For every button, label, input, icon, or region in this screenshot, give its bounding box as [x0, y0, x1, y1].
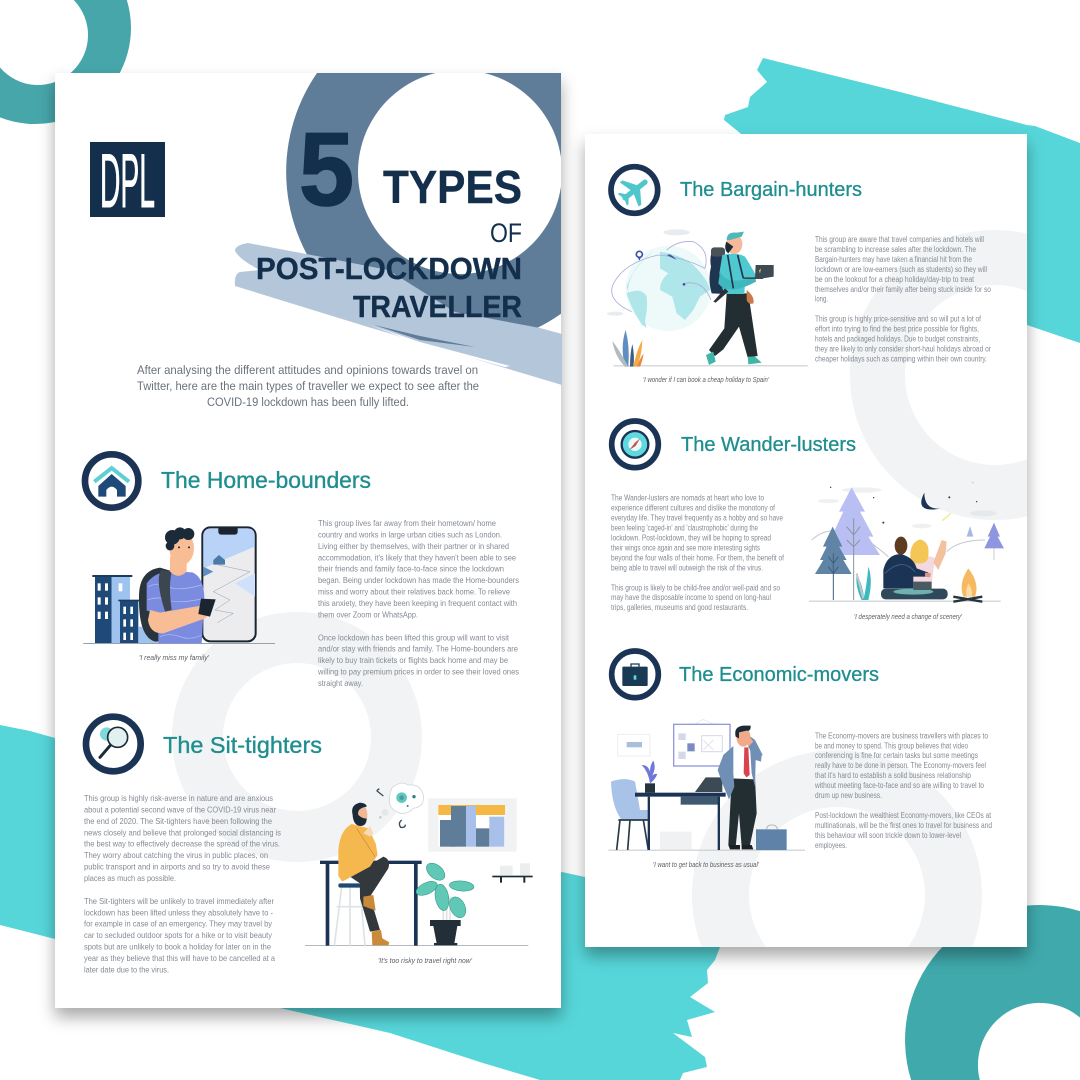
- quote: 'I wonder if I can book a cheap holiday to Spain': [643, 375, 769, 384]
- body text: This group is likely to be child-free and/or well-paid and so: [611, 583, 781, 592]
- illustration: man at table worrying: [305, 783, 533, 946]
- title: TYPES: [383, 161, 522, 213]
- panel: right infographic sheet: [585, 134, 1027, 947]
- icon: compass: [612, 421, 658, 468]
- body text: they are likely to only consider short-haul holidays abroad or: [815, 344, 991, 354]
- body text: [84, 793, 282, 974]
- body text: them over Zoom or WhatsApp.: [318, 609, 418, 619]
- body text: began. Being under lockdown has made the Home-bounders: [318, 575, 520, 585]
- body text: country and works in large urban cities such as London.: [318, 529, 502, 539]
- heading: The Sit-tighters: [163, 732, 322, 758]
- body text: beyond the four walls of their home. For them, the benefit of: [611, 553, 785, 562]
- icon: briefcase: [612, 651, 658, 698]
- background: bottom teal brush stroke: [280, 872, 720, 1080]
- quote: 'I want to get back to business as usual': [653, 860, 759, 869]
- intro text: [137, 363, 479, 409]
- body text: miss and worry about their relatives back home. To relieve: [318, 587, 510, 597]
- icon: magnifier: [86, 717, 141, 771]
- body text: straight away.: [318, 678, 363, 688]
- body text: The Sit-tighters will be unlikely to travel immediately after: [84, 896, 274, 906]
- intro text: After analysing the different attitudes and opinions towards travel on: [137, 363, 478, 377]
- title: [256, 112, 522, 324]
- body text: Living either by themselves, with their partner or in shared: [318, 541, 509, 551]
- body text: lockdown or are low-earners (such as students) so they will: [815, 265, 987, 274]
- text: DPL: [100, 139, 155, 224]
- title: POST-LOCKDOWN: [256, 251, 522, 286]
- icon: aeroplane: [611, 167, 658, 213]
- title: 5: [299, 112, 354, 228]
- panel: left infographic sheet: [55, 73, 561, 1008]
- heading: The Bargain-hunters: [680, 179, 862, 201]
- heading: The Wander-lusters: [681, 434, 856, 456]
- body text: places as much as possible.: [84, 873, 176, 883]
- section: The Home-bounders: [83, 454, 520, 688]
- body text: [611, 494, 785, 612]
- section: The Economic-movers: [608, 651, 992, 869]
- body text: been feeling 'caged-in' and 'claustrophobic' during the: [611, 524, 758, 533]
- background: top-right teal brush stroke: [724, 58, 1080, 343]
- section: The Bargain-hunters: [607, 167, 992, 384]
- body text: year as they believe that this will have to be cancelled at a: [84, 953, 275, 963]
- body text: this anxiety, they have been keeping in frequent contact with: [318, 598, 517, 608]
- body text: experience different cultures and dislike the monotony of: [611, 504, 776, 513]
- body text: drum up new business.: [815, 791, 882, 800]
- body text: [814, 731, 992, 850]
- title: TRAVELLER: [353, 289, 522, 324]
- body text: news closely and believe that prolonged social distancing is: [84, 827, 282, 837]
- body text: themselves and/or their family after being stuck inside for so: [815, 285, 992, 294]
- intro text: COVID-19 lockdown has been fully lifted.: [207, 395, 409, 409]
- body text: really have to be done in person. The Economy-movers feel: [815, 761, 986, 770]
- background: bottom-right ring: [905, 905, 1080, 1080]
- body text: car to secluded outdoor spots for a hike or to visit beauty: [84, 930, 273, 940]
- body text: This group are aware that travel companies and hotels will: [815, 235, 984, 244]
- body text: conferencing is fine for certain tasks but some meetings: [815, 751, 978, 760]
- body text: hotels and packaged holidays. Due to budget constraints,: [815, 334, 980, 344]
- body text: their friends and family face-to-face since the lockdown: [318, 564, 504, 574]
- body text: multinationals, will be the first ones to travel for business and: [815, 821, 992, 830]
- background: top-left ring: [0, 0, 131, 124]
- body text: later date due to the virus.: [84, 964, 169, 974]
- illustration: couple at campfire: [809, 482, 1004, 602]
- body text: long.: [815, 295, 828, 304]
- body text: may have the disposable income to spend on long-haul: [611, 593, 771, 602]
- body text: the end of 2020. The Sit-tighters have been following the: [84, 816, 272, 826]
- body text: [317, 518, 520, 688]
- body text: being able to travel will outweigh the risk of the virus.: [611, 563, 763, 572]
- body text: everyday life. They travel frequently as a hobby and so have: [611, 514, 783, 523]
- body text: this behaviour will soon trickle down to lower-level: [815, 831, 961, 840]
- title: OF: [490, 218, 522, 248]
- body text: spots but are unlikely to book a holiday for later on in the: [84, 942, 271, 952]
- body text: This group is highly price-sensitive and so will put a lot of: [815, 315, 982, 324]
- background: bottom-left teal brush stroke: [0, 725, 120, 950]
- body text: accommodation, it's likely that they haven't been able to see: [318, 552, 516, 562]
- body text: be on the lookout for a cheap holiday/day-trip to treat: [815, 275, 975, 284]
- body text: They worry about catching the virus in public places, on: [84, 850, 268, 860]
- body text: public transport and in airports and so try to avoid these: [84, 862, 270, 872]
- illustration: businessman at desk on phone: [608, 719, 805, 851]
- body text: This group lives far away from their hometown/ home: [318, 518, 496, 528]
- section: The Wander-lusters: [611, 421, 1004, 621]
- quote: 'I desperately need a change of scenery': [854, 612, 962, 621]
- intro text: Twitter, here are the main types of traveller we expect to see after the: [137, 379, 479, 393]
- body text: lockdown. Post-lockdown, they will be hoping to spread: [611, 534, 771, 542]
- body text: be scrambling to increase sales after the lockdown. The: [815, 245, 976, 254]
- quote: 'I really miss my family': [139, 653, 209, 662]
- body text: the best way to effectively decrease the spread of the virus.: [84, 839, 280, 849]
- body text: The Wander-lusters are nomads at heart who love to: [611, 494, 765, 503]
- illustration: traveller with globe and laptop: [607, 229, 808, 367]
- body text: The Economy-movers are business travellers with places to: [815, 731, 989, 740]
- icon: house: [85, 454, 138, 508]
- header brush stroke: [235, 243, 562, 385]
- body text: Post-lockdown the wealthiest Economy-movers, like CEOs at: [815, 811, 992, 820]
- heading: The Economic-movers: [679, 664, 879, 686]
- body text: and/or stay with friends and family. The Home-bounders are: [318, 644, 518, 654]
- illustration: man with phone map: [83, 527, 275, 644]
- body text: without meeting face-to-face and so are willing to travel to: [814, 781, 985, 790]
- body text: trips, galleries, museums and good restaurants.: [611, 603, 748, 612]
- body text: that it's hard to establish a solid business relationship: [815, 771, 972, 780]
- body text: be and money to spend. This group believes that video: [815, 741, 969, 750]
- quote: 'It's too risky to travel right now': [378, 956, 472, 965]
- section: The Sit-tighters: [84, 717, 533, 974]
- body text: employees.: [815, 841, 847, 850]
- body text: about a potential second wave of the COVID-19 virus near: [84, 804, 276, 814]
- logo: DPL: [90, 139, 165, 224]
- body text: for example in case of an emergency. They may travel by: [84, 919, 273, 929]
- body text: effort into trying to find the best price possible for flights,: [815, 325, 979, 334]
- body text: cheaper holidays such as camping within their own country.: [815, 354, 987, 363]
- body text: lockdown has been lifted unless they absolutely have to -: [84, 907, 273, 917]
- body text: Bargain-hunters may have taken a financial hit from the: [815, 255, 972, 264]
- body text: willing to pay premium prices in order to see their loved ones: [317, 667, 520, 677]
- body text: their wings once again and see more interesting sights: [611, 544, 760, 552]
- body text: This group is highly risk-averse in nature and are anxious: [84, 793, 274, 803]
- body text: Once lockdown has been lifted this group will want to visit: [318, 632, 509, 642]
- heading: The Home-bounders: [161, 467, 371, 493]
- body text: [815, 235, 992, 363]
- body text: likely to buy train tickets or flights back home and may be: [318, 655, 508, 665]
